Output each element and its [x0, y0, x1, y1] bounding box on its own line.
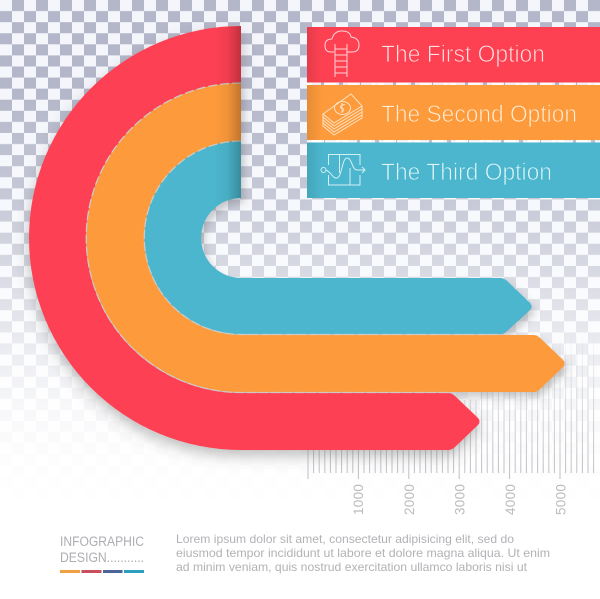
dashed seams between bands: [86, 83, 503, 392]
infographic design logo: [60, 534, 144, 573]
lorem ipsum text block: ad minim veniam, quis nostrud exercitation ullamco laboris nisi ut: [176, 560, 528, 574]
banner: second option: [307, 85, 600, 140]
banner dashed gaps: [307, 84, 600, 141]
orange arrow band: [87, 83, 565, 392]
label: the second option: The Second Option: [381, 101, 577, 128]
band shadows: [87, 83, 565, 392]
fold shading at band tops: [214, 26, 241, 210]
scale axis labels: 3000: [452, 484, 468, 515]
lorem ipsum text block: [176, 532, 550, 574]
scale axis labels: 5000: [554, 484, 568, 515]
label: the third option: The Third Option: [381, 159, 552, 186]
scale axis ticks: [308, 330, 594, 479]
logo text: DESIGN...........: [60, 550, 144, 565]
panel: option banners: [307, 27, 600, 198]
scale axis labels: 4000: [503, 484, 518, 515]
icon: stack of money: [323, 94, 362, 135]
scale axis labels: [351, 484, 568, 515]
scale axis labels: 1000: [351, 484, 366, 515]
icon: winding path: [321, 154, 365, 185]
icon: cloud with ladder: [325, 31, 359, 77]
logo text: [60, 534, 144, 565]
teal arrow band: [144, 141, 532, 334]
banner: first option: [307, 27, 600, 82]
red arrow band: [29, 26, 480, 450]
lorem ipsum text block: eiusmod tempor incididunt ut labore et dolore magna aliqua. Ut enim: [176, 546, 550, 560]
logo text: INFOGRAPHIC: [60, 534, 144, 549]
scale axis labels: 2000: [402, 484, 417, 515]
logo colour bars: [60, 570, 144, 573]
lorem ipsum text block: Lorem ipsum dolor sit amet, consectetur adipisicing elit, sed do: [176, 532, 514, 546]
banner: third option: [307, 142, 600, 198]
label: the first option: The First Option: [381, 41, 545, 68]
